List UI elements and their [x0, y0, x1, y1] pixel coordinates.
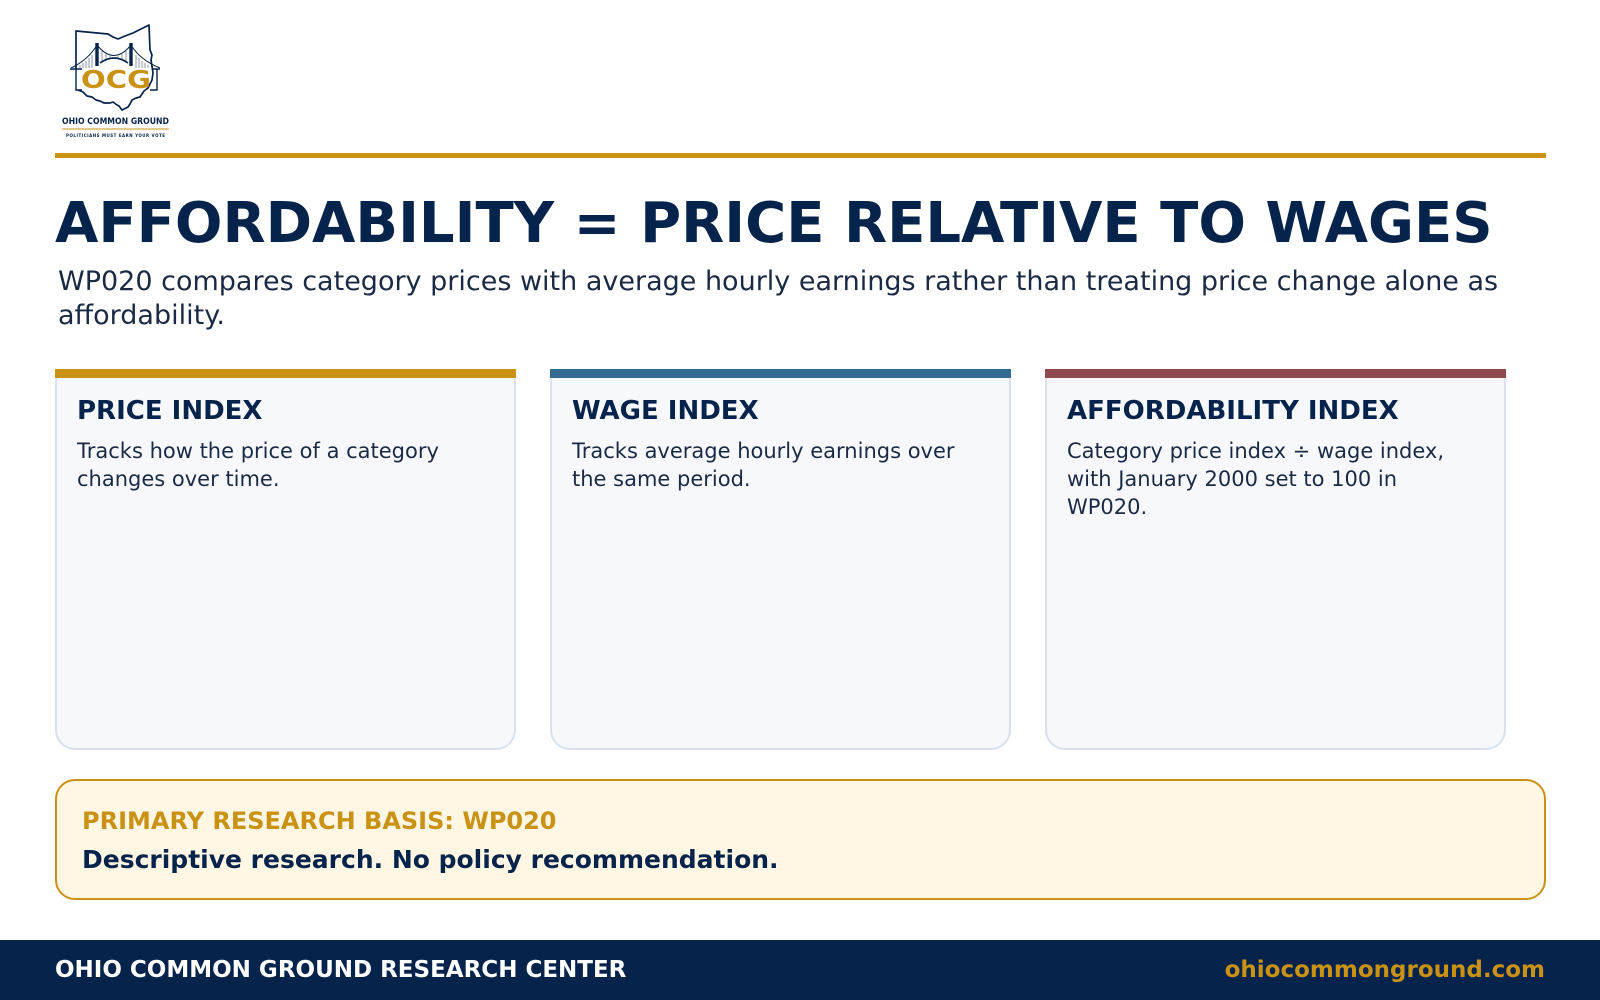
text: price index description: changes over time. [77, 467, 280, 491]
title: AFFORDABILITY = PRICE RELATIVE TO WAGES [55, 191, 1493, 256]
text: price index description: Tracks how the price of a category [77, 439, 439, 463]
text: affordability index description: WP020. [1067, 495, 1147, 519]
heading: wage index: WAGE INDEX [572, 396, 759, 426]
subtitle: WP020 compares category prices with average hourly earnings rather than treating price change alone as [58, 266, 1498, 297]
footer website: ohiocommonground.com [1225, 957, 1545, 983]
text: wage index description [572, 439, 955, 491]
subtitle [58, 266, 1498, 331]
header rule [55, 153, 1546, 158]
footer organization: OHIO COMMON GROUND RESEARCH CENTER [55, 957, 626, 983]
text: affordability index description [1067, 439, 1444, 519]
heading: price index: PRICE INDEX [77, 396, 262, 426]
callout: primary research basis [55, 779, 1546, 900]
panel: affordability index [1045, 369, 1506, 750]
logo: Ohio Common Ground [62, 24, 169, 138]
subtitle: affordability. [58, 300, 225, 331]
text: affordability index description: with January 2000 set to 100 in [1067, 467, 1397, 491]
panel: price index [55, 369, 516, 750]
logo wordmark: OHIO COMMON GROUND [62, 117, 169, 127]
heading: affordability index: AFFORDABILITY INDEX [1067, 396, 1399, 426]
text: wage index description: Tracks average hourly earnings over [572, 439, 955, 463]
text: affordability index description: Category price index ÷ wage index, [1067, 439, 1444, 463]
icon: OCG letters: OCG [81, 65, 151, 94]
footer bar [0, 940, 1600, 1000]
icon: Ohio outline [76, 25, 153, 110]
panel: wage index [550, 369, 1011, 750]
logo tagline: POLITICIANS MUST EARN YOUR VOTE [66, 133, 165, 138]
callout heading: PRIMARY RESEARCH BASIS: WP020 [82, 807, 557, 835]
text: wage index description: the same period. [572, 467, 751, 491]
text: price index description [76, 439, 439, 491]
callout text: Descriptive research. No policy recommendation. [82, 845, 779, 874]
icon: bridge [70, 43, 160, 90]
